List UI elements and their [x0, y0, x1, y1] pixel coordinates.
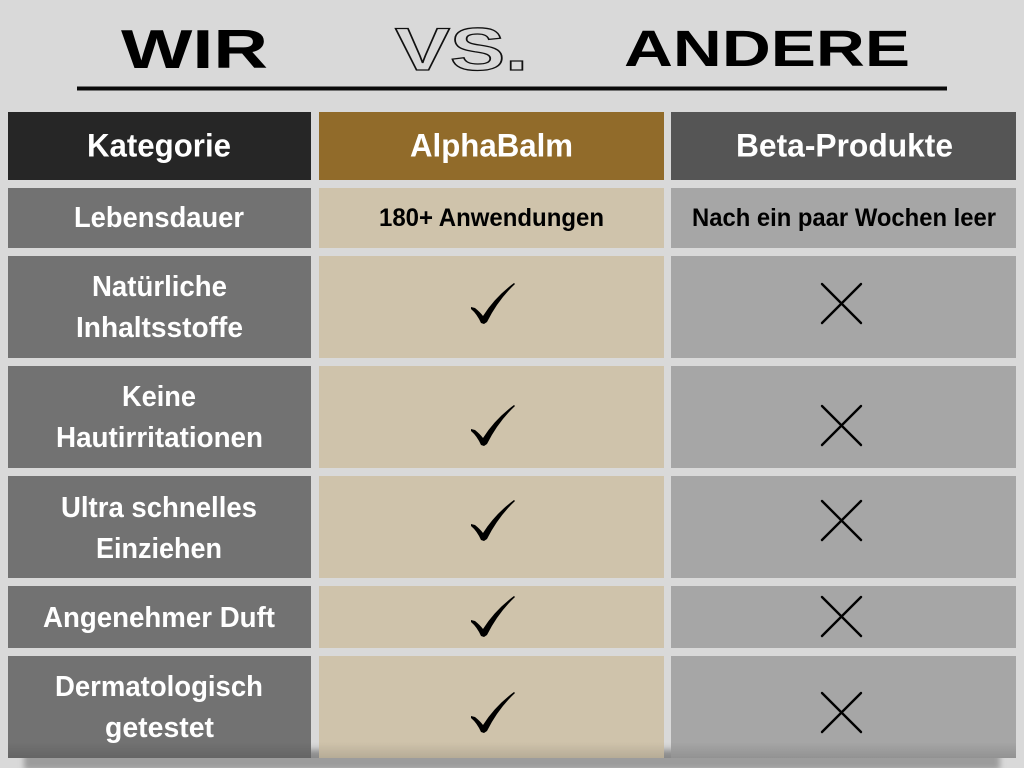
title [121, 16, 910, 83]
header: AlphaBalm: AlphaBalm [410, 128, 573, 164]
label: Dermatologisch getestet [8, 656, 311, 758]
label: Natürliche Inhaltsstoffe [8, 256, 311, 358]
label: Keine Hautirritationen [8, 366, 311, 468]
cell with cross [671, 586, 1016, 648]
label: Lebensdauer [8, 188, 311, 248]
cell with cross [671, 366, 1016, 468]
row: Natürliche Inhaltsstoffe [8, 256, 1016, 358]
value: AlphaBalm lifetime: 180+ Anwendungen [379, 204, 604, 232]
row: Ultra schnelles Einziehen [8, 476, 1016, 578]
label: Angenehmer Duft [8, 586, 311, 648]
header: Beta-Produkte: Beta-Produkte [736, 128, 953, 164]
title: VS. outlined: VS. [395, 16, 528, 83]
header: Kategorie [8, 112, 311, 180]
cell with check [319, 656, 664, 758]
row: Dermatologisch getestet [8, 656, 1016, 758]
label: Dermatologisch getestet: getestet [105, 712, 214, 744]
title: ANDERE: ANDERE [624, 20, 910, 77]
table shadow [24, 750, 1000, 768]
value: Beta lifetime [671, 188, 1016, 248]
label: Natürliche Inhaltsstoffe: Natürliche [92, 271, 227, 303]
cell with check [319, 366, 664, 468]
header: AlphaBalm [319, 112, 664, 180]
cell with cross [671, 656, 1016, 758]
label: Keine Hautirritationen: Hautirritationen [56, 422, 263, 454]
header: Beta-Produkte [671, 112, 1016, 180]
cell with check [319, 256, 664, 358]
label: Angenehmer Duft: Angenehmer Duft [43, 602, 275, 634]
bottom shading over table [8, 742, 1016, 758]
title underline [77, 86, 947, 90]
label: Dermatologisch getestet: Dermatologisch [55, 671, 263, 703]
label: Ultra schnelles Einziehen [8, 476, 311, 578]
cell with cross [671, 476, 1016, 578]
label: Lebensdauer: Lebensdauer [74, 202, 244, 234]
label: Ultra schnelles Einziehen: Einziehen [96, 533, 222, 565]
row: Angenehmer Duft [8, 586, 1016, 648]
cell with check [319, 586, 664, 648]
value: AlphaBalm lifetime [319, 188, 664, 248]
label: Natürliche Inhaltsstoffe: Inhaltsstoffe [76, 312, 243, 344]
title: WIR: WIR [121, 18, 268, 80]
label: Ultra schnelles Einziehen: Ultra schnelles [61, 492, 257, 524]
cell with cross [671, 256, 1016, 358]
header: Kategorie: Kategorie [87, 128, 231, 164]
table header row [8, 112, 1016, 180]
value: Beta lifetime: Nach ein paar Wochen leer [692, 204, 996, 232]
row: Keine Hautirritationen [8, 366, 1016, 468]
label: Keine Hautirritationen: Keine [122, 381, 196, 413]
row: Lebensdauer [8, 188, 1016, 248]
cell with check [319, 476, 664, 578]
